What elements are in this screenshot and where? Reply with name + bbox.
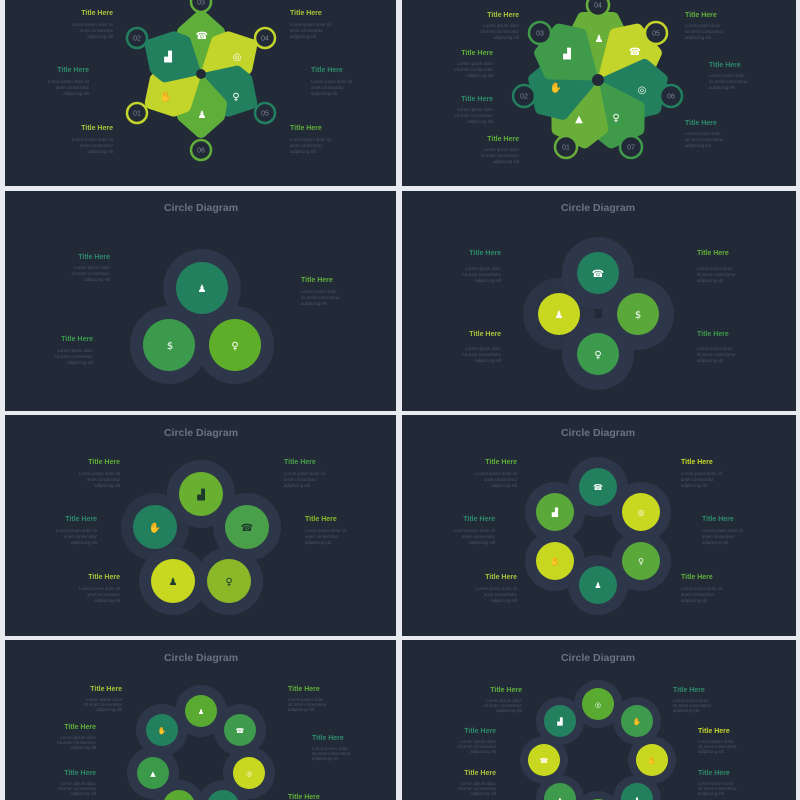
number badges: 05	[652, 30, 660, 38]
labels: Title Here	[697, 331, 729, 338]
labels: adipiscing elit	[87, 34, 114, 39]
labels: Title Here	[61, 336, 93, 343]
labels: Lorem ipsum dolor	[74, 265, 111, 270]
labels: amet consectetur	[290, 143, 324, 148]
circles	[121, 460, 281, 615]
labels: Title Here	[464, 770, 496, 777]
circles: ♀	[231, 341, 239, 352]
labels: Title Here	[81, 125, 113, 132]
labels: Title Here	[698, 770, 730, 777]
labels: Lorem ipsum dolor	[86, 697, 123, 702]
labels: adipiscing elit	[493, 35, 520, 40]
icons: ♀	[612, 113, 620, 124]
labels: adipiscing elit	[63, 91, 90, 96]
labels: adipiscing elit	[475, 358, 502, 363]
labels: sit amet consectetur	[481, 153, 520, 158]
labels: Title Here	[487, 136, 519, 143]
labels	[455, 12, 748, 164]
circles: ♟	[594, 581, 602, 590]
icons	[550, 34, 646, 125]
labels: sit amet consectetur	[709, 79, 748, 84]
icons: ▲	[575, 114, 583, 125]
labels: sit amet consectetur	[72, 271, 111, 276]
petals star 7	[532, 18, 664, 147]
labels: Lorem ipsum dolor	[465, 346, 502, 351]
labels: Title Here	[464, 728, 496, 735]
circles: $	[635, 310, 641, 321]
labels: Lorem ipsum dolor sit	[476, 471, 518, 476]
circles: ◎	[595, 701, 601, 709]
number badges: 02	[133, 36, 141, 42]
labels: amet consectetur	[311, 85, 345, 90]
labels: sit amet consectetur	[697, 272, 736, 277]
labels: amet consectetur	[484, 592, 518, 597]
labels: Lorem ipsum dolor sit	[454, 528, 496, 533]
labels: amet consectetur	[80, 28, 114, 33]
labels: adipiscing elit	[70, 745, 97, 750]
labels: Title Here	[312, 735, 344, 742]
icons: ✋	[160, 90, 172, 103]
circles: ♀	[594, 350, 602, 361]
labels: Lorem ipsum dolor	[312, 746, 348, 751]
labels: adipiscing elit	[467, 119, 494, 124]
panel: 4-circle diagram	[402, 191, 796, 411]
labels: adipiscing elit	[94, 483, 121, 488]
labels	[58, 686, 351, 800]
labels: adipiscing elit	[697, 358, 724, 363]
labels: adipiscing elit	[491, 598, 518, 603]
circles: ▟	[557, 717, 563, 726]
labels: amet consectetur	[56, 85, 90, 90]
labels: sit amet consectetur	[312, 751, 351, 756]
labels: Title Here	[709, 62, 741, 69]
circles: ◎	[246, 770, 252, 778]
circles: ♀	[638, 557, 644, 566]
icons: ☎	[629, 47, 641, 58]
labels: Title Here	[487, 12, 519, 19]
labels: amet consectetur	[290, 28, 324, 33]
labels: adipiscing elit	[698, 791, 725, 796]
labels: amet consectetur	[284, 477, 318, 482]
labels: sit amet consectetur	[685, 29, 724, 34]
labels: adipiscing elit	[709, 85, 736, 90]
circles: ✋	[149, 521, 161, 534]
icons: ♟	[198, 110, 206, 121]
labels: Lorem ipsum dolor	[486, 698, 523, 703]
labels: Title Here	[90, 686, 122, 693]
labels: Lorem ipsum dolor sit	[681, 471, 723, 476]
circles	[523, 237, 674, 390]
panel: 5-circle diagram	[5, 415, 396, 636]
icons: ◎	[638, 85, 646, 96]
labels: Title Here	[485, 459, 517, 466]
number badges: 01	[562, 144, 570, 152]
labels: sit amet consectetur	[481, 29, 520, 34]
labels: adipiscing elit	[685, 143, 712, 148]
labels: amet consectetur	[681, 477, 715, 482]
labels: Lorem ipsum dolor sit	[290, 137, 332, 142]
labels: Lorem ipsum dolor	[709, 73, 745, 78]
number badges: 06	[197, 148, 205, 154]
circles: ☎	[592, 269, 604, 280]
labels: Title Here	[81, 10, 113, 17]
labels: Title Here	[685, 12, 717, 19]
labels: Lorem ipsum dolor	[697, 266, 733, 271]
number badges: 03	[536, 30, 544, 38]
heading: Circle Diagram	[561, 652, 635, 664]
labels: adipiscing elit	[312, 756, 339, 761]
circles: ☎	[593, 483, 603, 492]
labels: Lorem ipsum dolor	[57, 348, 94, 353]
number badges: 05	[261, 110, 269, 118]
labels: adipiscing elit	[469, 540, 496, 545]
panel: 7-circle diagram	[5, 640, 396, 800]
labels: Title Here	[305, 516, 337, 523]
labels: Title Here	[463, 516, 495, 523]
labels: Lorem ipsum dolor	[60, 781, 97, 786]
number badges	[127, 0, 275, 160]
labels: adipiscing elit	[290, 149, 317, 154]
labels: adipiscing elit	[96, 707, 123, 712]
labels: adipiscing elit	[467, 73, 494, 78]
labels: adipiscing elit	[673, 708, 700, 713]
panel: 8-circle diagram	[402, 640, 796, 800]
labels: sit amet consectetur	[463, 352, 502, 357]
labels: Title Here	[485, 574, 517, 581]
labels: adipiscing elit	[681, 598, 708, 603]
icons: ♟	[595, 34, 603, 45]
labels: adipiscing elit	[491, 483, 518, 488]
panel: six-petal star	[5, 0, 396, 186]
heading: Circle Diagram	[164, 652, 238, 664]
panel: 6-circle diagram	[402, 415, 796, 636]
labels: adipiscing elit	[685, 35, 712, 40]
circles: ✋	[648, 756, 656, 765]
icons: ☎	[196, 31, 208, 42]
labels: amet consectetur	[87, 592, 121, 597]
labels: Title Here	[698, 728, 730, 735]
labels: Title Here	[78, 254, 110, 261]
labels: sit amet consectetur	[463, 272, 502, 277]
labels: Lorem ipsum dolor sit	[79, 471, 121, 476]
number badges: 04	[261, 36, 269, 42]
labels	[454, 459, 744, 603]
labels: Lorem ipsum dolor sit	[476, 586, 518, 591]
labels: adipiscing elit	[84, 277, 111, 282]
labels: sit amet consectetur	[288, 702, 327, 707]
labels: Lorem ipsum dolor sit	[56, 528, 98, 533]
labels: amet consectetur	[484, 477, 518, 482]
labels: sit amet consectetur	[301, 295, 340, 300]
heading: Circle Diagram	[561, 202, 635, 214]
labels: adipiscing elit	[290, 34, 317, 39]
labels: Lorem ipsum dolor	[460, 739, 497, 744]
circles: ♟	[198, 708, 204, 716]
labels: sit amet consectetur	[697, 352, 736, 357]
circles: ▟	[551, 507, 559, 517]
labels: adipiscing elit	[470, 791, 497, 796]
labels: sit amet consectetur	[55, 354, 94, 359]
labels: Lorem ipsum dolor sit	[290, 22, 332, 27]
circles: ♟	[198, 284, 206, 295]
labels: adipiscing elit	[311, 91, 338, 96]
labels: Lorem ipsum dolor	[685, 131, 721, 136]
circles	[525, 457, 671, 615]
heading: Circle Diagram	[561, 427, 635, 439]
labels: adipiscing elit	[284, 483, 311, 488]
circles	[130, 249, 274, 384]
labels: amet consectetur	[681, 592, 715, 597]
labels: sit amet consectetur	[455, 67, 494, 72]
labels: Title Here	[284, 459, 316, 466]
circles: ♟	[555, 310, 563, 321]
labels: sit amet consectetur	[58, 786, 97, 791]
circles: ☎	[236, 727, 245, 735]
labels: Title Here	[702, 516, 734, 523]
labels: Lorem ipsum dolor sit	[284, 471, 326, 476]
labels: Lorem ipsum dolor	[301, 289, 337, 294]
circles: $	[167, 341, 173, 352]
labels	[55, 254, 340, 365]
labels: sit amet consectetur	[458, 744, 497, 749]
labels: adipiscing elit	[70, 791, 97, 796]
labels: Lorem ipsum dolor	[698, 739, 734, 744]
labels: adipiscing elit	[87, 149, 114, 154]
labels: Title Here	[461, 50, 493, 57]
labels: Title Here	[88, 459, 120, 466]
labels	[56, 459, 347, 603]
labels: Lorem ipsum dolor sit	[305, 528, 347, 533]
icons: ♀	[232, 92, 240, 103]
icons: ▟	[562, 47, 571, 60]
labels: sit amet consectetur	[458, 786, 497, 791]
labels: Title Here	[311, 67, 343, 74]
labels: Lorem ipsum dolor	[673, 698, 709, 703]
labels: amet consectetur	[702, 534, 736, 539]
circles: ✋	[550, 556, 560, 566]
labels: amet consectetur	[87, 477, 121, 482]
labels: adipiscing elit	[496, 708, 523, 713]
labels: sit amet consectetur	[698, 744, 737, 749]
labels: adipiscing elit	[305, 540, 332, 545]
number badges: 01	[133, 110, 141, 118]
panel: 3-circle diagram	[5, 191, 396, 411]
labels: Lorem ipsum dolor sit	[72, 22, 114, 27]
labels: sit amet consectetur	[673, 703, 712, 708]
labels: Title Here	[681, 574, 713, 581]
heading: Circle Diagram	[164, 202, 238, 214]
labels: Title Here	[490, 687, 522, 694]
labels	[48, 10, 353, 154]
labels: adipiscing elit	[697, 278, 724, 283]
labels: Title Here	[290, 10, 322, 17]
icons: ▟	[163, 50, 172, 63]
labels: sit amet consectetur	[484, 703, 523, 708]
labels: adipiscing elit	[681, 483, 708, 488]
number badges: 02	[520, 94, 528, 100]
circles	[520, 680, 676, 800]
icons: ◎	[233, 52, 241, 63]
labels: sit amet consectetur	[685, 137, 724, 142]
labels: Lorem ipsum dolor	[697, 346, 733, 351]
labels: adipiscing elit	[470, 749, 497, 754]
circles: ◎	[638, 508, 645, 517]
labels: Lorem ipsum dolor	[698, 781, 734, 786]
circles: ♀	[225, 577, 233, 588]
labels: Lorem ipsum dolor sit	[48, 79, 90, 84]
labels: Title Here	[288, 686, 320, 693]
labels: Title Here	[64, 724, 96, 731]
circles: ☎	[540, 757, 549, 765]
labels: amet consectetur	[64, 534, 98, 539]
labels: Title Here	[685, 120, 717, 127]
labels: amet consectetur	[305, 534, 339, 539]
labels: Lorem ipsum dolor	[685, 23, 721, 28]
labels	[458, 687, 737, 796]
circles: ▲	[150, 770, 156, 778]
labels: Title Here	[469, 331, 501, 338]
labels: Lorem ipsum dolor	[460, 781, 497, 786]
labels: adipiscing elit	[475, 278, 502, 283]
labels: Title Here	[301, 277, 333, 284]
labels: Lorem ipsum dolor sit	[72, 137, 114, 142]
labels: Title Here	[681, 459, 713, 466]
labels: Title Here	[64, 770, 96, 777]
icons: ✋	[550, 81, 562, 94]
number badges: 04	[594, 2, 602, 10]
circles: ▟	[196, 488, 205, 501]
labels: Lorem ipsum dolor sit	[702, 528, 744, 533]
labels: Lorem ipsum dolor sit	[79, 586, 121, 591]
circles	[127, 685, 275, 800]
labels	[463, 250, 736, 363]
panel: seven-petal star	[402, 0, 796, 186]
labels: sit amet consectetur	[84, 702, 123, 707]
circles: ☎	[241, 523, 253, 534]
labels: Lorem ipsum dolor	[483, 23, 520, 28]
number badges: 07	[627, 144, 635, 152]
labels: Lorem ipsum dolor	[288, 697, 324, 702]
labels: Lorem ipsum dolor sit	[681, 586, 723, 591]
labels: Lorem ipsum dolor sit	[311, 79, 353, 84]
labels: adipiscing elit	[493, 159, 520, 164]
labels: Lorem ipsum dolor	[483, 147, 520, 152]
labels: Title Here	[673, 687, 705, 694]
labels: adipiscing elit	[71, 540, 98, 545]
labels: Title Here	[461, 96, 493, 103]
heading: Circle Diagram	[164, 427, 238, 439]
petals star 6	[141, 16, 261, 132]
labels: Lorem ipsum dolor	[457, 107, 494, 112]
icons	[160, 31, 241, 121]
number badges: 06	[667, 94, 675, 100]
circles: ♟	[169, 577, 177, 588]
labels: adipiscing elit	[698, 749, 725, 754]
circles: ✋	[633, 717, 641, 726]
labels: amet consectetur	[80, 143, 114, 148]
circles: ✋	[158, 726, 166, 735]
labels: adipiscing elit	[94, 598, 121, 603]
number badges	[513, 0, 682, 158]
labels: Lorem ipsum dolor	[465, 266, 502, 271]
labels: adipiscing elit	[288, 707, 315, 712]
labels: sit amet consectetur	[698, 786, 737, 791]
labels: adipiscing elit	[702, 540, 729, 545]
labels: Title Here	[469, 250, 501, 257]
labels: sit amet consectetur	[455, 113, 494, 118]
labels: adipiscing elit	[67, 360, 94, 365]
labels: Lorem ipsum dolor	[457, 61, 494, 66]
labels: Lorem ipsum dolor	[60, 735, 97, 740]
labels: adipiscing elit	[301, 301, 328, 306]
labels: Title Here	[88, 574, 120, 581]
labels: amet consectetur	[462, 534, 496, 539]
labels: Title Here	[697, 250, 729, 257]
labels: Title Here	[290, 125, 322, 132]
labels: Title Here	[65, 516, 97, 523]
labels: sit amet consectetur	[58, 740, 97, 745]
labels: Title Here	[57, 67, 89, 74]
